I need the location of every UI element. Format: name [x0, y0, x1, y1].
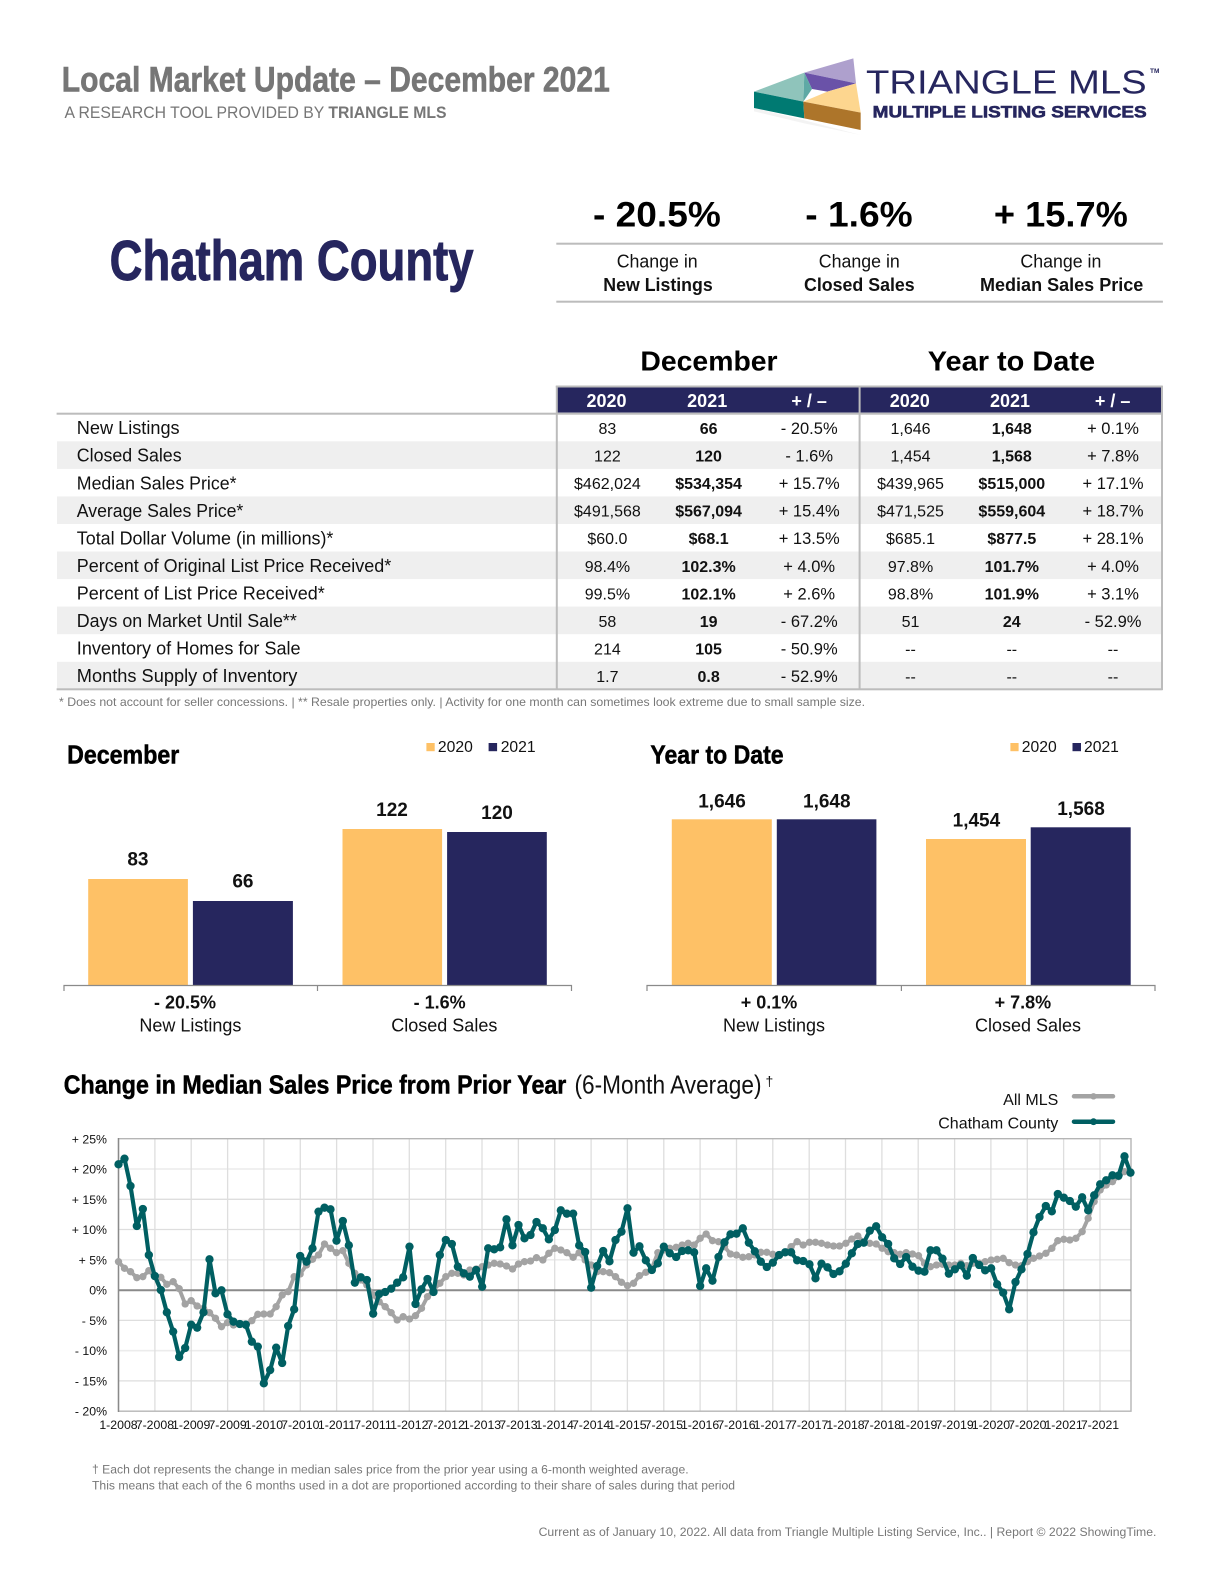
bars: Closed Sales: 1,568	[1057, 799, 1105, 820]
row: Months Supply of Inventory	[77, 666, 1118, 686]
row: Months Supply of Inventory: --	[905, 669, 916, 686]
bars: Closed Sales	[926, 799, 1131, 985]
x axis labels: 7-2021	[1081, 1418, 1119, 1432]
table footnote: * Does not account for seller concessions. | ** Resale properties only. | Activity for one month can sometimes look extreme due to small sample size.	[59, 695, 865, 709]
chart footnote: † Each dot represents the change in median sales price from the prior year using a 6-month weighted average.	[92, 1462, 689, 1476]
chart heading: December	[67, 740, 179, 770]
bars: Closed Sales: 1,454	[953, 810, 1001, 831]
x axis labels: 7-2012	[427, 1418, 465, 1432]
row: Months Supply of Inventory: 1.7	[596, 669, 619, 686]
x axis labels: 7-2009	[208, 1418, 247, 1432]
row: Median Sales Price: $439,965	[877, 476, 944, 493]
x axis labels: 7-2008	[136, 1418, 174, 1432]
bars: Closed Sales	[342, 800, 547, 985]
row: Total Dollar Volume: $68.1	[689, 531, 729, 548]
line: Chatham County	[118, 1156, 1130, 1383]
y axis labels: + 20%	[72, 1162, 107, 1176]
row: Percent of Original List Price Received: + 4.0%	[1087, 558, 1139, 576]
row: New Listings: - 20.5%	[781, 420, 838, 438]
chart footnote	[92, 1462, 735, 1493]
row: Days on Market Until Sale: Days on Market Until Sale**	[77, 611, 297, 631]
page footer credit: Current as of January 10, 2022. All data from Triangle Multiple Listing Service, Inc.. | Report © 2022 ShowingTime.	[539, 1525, 1156, 1539]
row: Percent of List Price Received: Percent of List Price Received*	[77, 584, 325, 604]
row: Closed Sales	[77, 446, 1139, 466]
chart legend	[1010, 739, 1119, 756]
bars: New Listings: 1,646	[698, 791, 746, 812]
row: Average Sales Price	[77, 501, 1144, 521]
row: Percent of Original List Price Received: 97.8%	[888, 559, 933, 576]
line chart: change in median sales price	[72, 1132, 1131, 1432]
row: Percent of Original List Price Received: + 4.0%	[783, 558, 835, 576]
table header bar	[557, 387, 1162, 413]
x axis labels: 7-2013	[499, 1418, 538, 1432]
row: Percent of List Price Received: 98.8%	[888, 586, 933, 603]
metric: closed sales	[804, 196, 915, 295]
row: Closed Sales: 120	[695, 449, 722, 466]
x axis labels: 1-2010	[245, 1418, 283, 1432]
header title: Local Market Update – December 2021	[62, 61, 610, 100]
row: Percent of List Price Received: 99.5%	[585, 586, 630, 603]
row: Average Sales Price: $567,094	[675, 504, 742, 521]
row: Inventory of Homes for Sale: --	[1108, 642, 1118, 658]
row: Closed Sales: 1,454	[890, 449, 931, 466]
table zebra rows	[57, 441, 1161, 689]
category label: Closed Sales: Closed Sales	[975, 1016, 1081, 1036]
row: Days on Market Until Sale	[77, 611, 1142, 631]
bar chart: Year to Date	[647, 739, 1155, 1036]
bars: Closed Sales: 122	[376, 800, 408, 821]
x axis labels: 1-2009	[172, 1418, 211, 1432]
x axis labels: 1-2021	[1044, 1418, 1083, 1432]
chart legend: 2021	[501, 739, 536, 756]
row: Inventory of Homes for Sale	[77, 639, 1118, 659]
metric: median sales price: + 15.7%	[994, 196, 1128, 235]
row: Total Dollar Volume: $60.0	[587, 531, 628, 548]
row: Total Dollar Volume: Total Dollar Volume (in millions)*	[77, 528, 333, 548]
metric: new listings: New Listings	[603, 275, 713, 295]
logo trademark: TM	[1150, 68, 1159, 75]
legend: Chatham County: Chatham County	[938, 1115, 1058, 1132]
row: Percent of List Price Received: 101.9%	[985, 586, 1039, 603]
bars: Closed Sales: 120	[481, 803, 513, 824]
legend: All MLS	[1003, 1092, 1113, 1109]
row: Inventory of Homes for Sale: Inventory of Homes for Sale	[77, 639, 301, 659]
row: Average Sales Price: $471,525	[877, 504, 944, 521]
row: Months Supply of Inventory: Months Supply of Inventory	[77, 666, 297, 686]
legend: All MLS: All MLS	[1003, 1092, 1058, 1109]
row: Percent of Original List Price Received: 98.4%	[585, 559, 630, 576]
category label: Closed Sales	[975, 993, 1081, 1036]
y axis labels: 0%	[89, 1284, 107, 1298]
logo tagline: MULTIPLE LISTING SERVICES	[873, 103, 1147, 121]
row: Median Sales Price: + 17.1%	[1082, 475, 1144, 493]
row: Average Sales Price: + 15.4%	[779, 503, 840, 521]
row: Inventory of Homes for Sale: --	[1006, 642, 1017, 658]
row: Days on Market Until Sale: 19	[700, 614, 718, 631]
row: New Listings: 1,648	[992, 421, 1032, 438]
row: New Listings: + 0.1%	[1087, 420, 1139, 438]
key metrics panel	[556, 196, 1163, 303]
row: Average Sales Price: $559,604	[978, 504, 1045, 521]
row: Percent of List Price Received: 102.1%	[681, 586, 736, 603]
metric: closed sales: - 1.6%	[805, 196, 913, 235]
x axis labels: 7-2014	[572, 1418, 610, 1432]
metric: closed sales: Change in	[819, 251, 900, 271]
row: Closed Sales: 122	[594, 449, 621, 466]
row: Inventory of Homes for Sale: - 50.9%	[781, 640, 838, 658]
x axis labels: 7-2010	[281, 1418, 320, 1432]
row: Average Sales Price: $491,568	[574, 504, 641, 521]
row: Percent of List Price Received	[77, 584, 1139, 604]
x axis labels: 1-2011	[318, 1418, 355, 1432]
x axis labels: 1-2013	[463, 1418, 501, 1432]
row: Percent of Original List Price Received: 101.7%	[985, 559, 1039, 576]
x axis labels: 1-2008	[99, 1418, 138, 1432]
line chart heading: †	[766, 1073, 773, 1089]
x axis labels: 1-2018	[826, 1418, 865, 1432]
table rules	[57, 386, 1163, 690]
line chart legend	[938, 1092, 1113, 1132]
bars: New Listings: 1,648	[803, 791, 851, 812]
row: Median Sales Price: $515,000	[978, 476, 1045, 493]
x axis labels: 1-2014	[536, 1418, 574, 1432]
logo icon	[754, 58, 861, 135]
table header bar: + / –	[1095, 391, 1130, 411]
x axis labels: 1-2020	[972, 1418, 1010, 1432]
x axis labels: 7-2016	[717, 1418, 756, 1432]
x axis labels: 7-2017	[790, 1418, 829, 1432]
row: Days on Market Until Sale: - 52.9%	[1085, 613, 1142, 631]
row: Percent of Original List Price Received	[77, 556, 1139, 576]
row: Percent of Original List Price Received: 102.3%	[681, 559, 736, 576]
row: Closed Sales: + 7.8%	[1087, 448, 1139, 466]
x axis labels: 1-2016	[681, 1418, 719, 1432]
metric: median sales price	[980, 196, 1143, 295]
row: Percent of Original List Price Received: Percent of Original List Price Received*	[77, 556, 391, 576]
table header bar: + / –	[791, 391, 827, 411]
category label: New Listings	[723, 993, 825, 1036]
row: Days on Market Until Sale: 58	[599, 614, 616, 631]
row: Months Supply of Inventory: 0.8	[697, 669, 720, 686]
chart heading: Year to Date	[650, 740, 784, 770]
bars: New Listings: 66	[232, 872, 253, 893]
line chart heading: Change in Median Sales Price from Prior Year	[64, 1069, 566, 1099]
category label: Closed Sales: Closed Sales	[391, 1016, 497, 1036]
logo wordmark: TRIANGLE MLS	[866, 64, 1147, 101]
row: Months Supply of Inventory: - 52.9%	[781, 668, 838, 686]
header subtitle: A RESEARCH TOOL PROVIDED BY TRIANGLE MLS	[64, 103, 446, 122]
row: Closed Sales: Closed Sales	[77, 446, 182, 466]
category label: New Listings: + 0.1%	[741, 993, 797, 1013]
row: Closed Sales: - 1.6%	[785, 448, 833, 466]
metric: closed sales: Closed Sales	[804, 275, 915, 295]
y axis labels: + 25%	[72, 1132, 107, 1146]
row: Total Dollar Volume	[77, 528, 1144, 548]
chart legend: 2020	[1022, 739, 1057, 756]
row: New Listings: New Listings	[77, 418, 180, 438]
table header bar: 2020	[586, 391, 627, 411]
line chart heading: (6-Month Average)	[574, 1069, 762, 1099]
row: Days on Market Until Sale: 24	[1003, 614, 1021, 631]
line: All MLS	[118, 1172, 1130, 1327]
y axis labels: - 10%	[75, 1344, 107, 1358]
row: Median Sales Price: $534,354	[675, 476, 742, 493]
row: New Listings: 1,646	[890, 421, 931, 438]
table header bar: 2020	[890, 391, 930, 411]
metric: median sales price: Change in	[1020, 251, 1101, 271]
y axis labels: - 15%	[75, 1374, 107, 1388]
row: Median Sales Price: Median Sales Price*	[77, 473, 236, 493]
row: Percent of List Price Received: + 3.1%	[1087, 585, 1139, 603]
chart footnote: This means that each of the 6 months used in a dot are proportioned according to their share of sales during that period	[92, 1479, 735, 1493]
x axis labels: 7-2011	[354, 1418, 392, 1432]
row: Total Dollar Volume: + 13.5%	[779, 530, 840, 548]
county name heading: Chatham County	[110, 229, 474, 293]
metric: new listings	[593, 196, 721, 295]
category label: Closed Sales: - 1.6%	[414, 993, 466, 1013]
row: Average Sales Price: Average Sales Price*	[77, 501, 243, 521]
table heading: Year to Date: Year to Date	[928, 346, 1095, 377]
row: Median Sales Price: + 15.7%	[779, 475, 840, 493]
category label: New Listings: New Listings	[723, 1016, 825, 1036]
bar chart: December	[64, 739, 572, 1036]
x axis labels: 1-2017	[754, 1418, 792, 1432]
row: Inventory of Homes for Sale: 214	[594, 642, 621, 658]
x axis labels: 7-2020	[1008, 1418, 1047, 1432]
y axis labels: - 20%	[75, 1405, 107, 1419]
row: New Listings: 66	[700, 421, 718, 438]
x axis labels	[99, 1418, 1119, 1432]
metric: new listings: Change in	[617, 251, 698, 271]
x axis labels: 7-2015	[645, 1418, 683, 1432]
chart legend: 2021	[1084, 739, 1119, 756]
chart legend: 2020	[438, 739, 473, 756]
bars: New Listings: 83	[127, 850, 148, 871]
metric: new listings: - 20.5%	[593, 196, 721, 235]
category label: New Listings	[139, 993, 241, 1036]
chart legend	[426, 739, 536, 756]
bars: New Listings	[672, 791, 876, 985]
category label: Closed Sales	[391, 993, 497, 1036]
y axis labels	[72, 1132, 107, 1419]
y axis labels: + 15%	[72, 1193, 107, 1207]
logo: Triangle MLS	[754, 58, 1159, 135]
row: Inventory of Homes for Sale: 105	[695, 642, 722, 658]
table heading: December: December	[640, 346, 778, 377]
row: Total Dollar Volume: $685.1	[886, 531, 935, 548]
row: Percent of List Price Received: + 2.6%	[783, 585, 835, 603]
row: Days on Market Until Sale: 51	[902, 614, 920, 631]
x axis labels: 1-2012	[390, 1418, 429, 1432]
row: New Listings	[77, 418, 1139, 438]
row: Total Dollar Volume: $877.5	[987, 531, 1036, 548]
category label: Closed Sales: + 7.8%	[995, 993, 1051, 1013]
data table	[57, 386, 1163, 690]
table header bar: 2021	[990, 391, 1030, 411]
category label: New Listings: - 20.5%	[154, 993, 216, 1013]
x axis labels: 1-2015	[608, 1418, 647, 1432]
row: Total Dollar Volume: + 28.1%	[1082, 530, 1144, 548]
y axis labels: - 5%	[82, 1314, 107, 1328]
row: Closed Sales: 1,568	[992, 449, 1032, 466]
table header bar: 2021	[687, 391, 727, 411]
x axis labels: 7-2018	[863, 1418, 901, 1432]
y axis labels: + 10%	[72, 1223, 107, 1237]
row: New Listings: 83	[599, 421, 616, 438]
row: Inventory of Homes for Sale: --	[905, 642, 916, 658]
row: Months Supply of Inventory: --	[1006, 669, 1017, 686]
x axis labels: 7-2019	[935, 1418, 974, 1432]
row: Median Sales Price	[77, 473, 1144, 493]
y axis labels: + 5%	[79, 1253, 107, 1267]
metric: median sales price: Median Sales Price	[980, 275, 1143, 295]
bars: New Listings	[88, 850, 293, 985]
x axis labels: 1-2019	[899, 1418, 938, 1432]
legend: Chatham County	[938, 1115, 1113, 1132]
category label: New Listings: New Listings	[139, 1016, 241, 1036]
row: Months Supply of Inventory: --	[1108, 669, 1118, 686]
row: Days on Market Until Sale: - 67.2%	[781, 613, 838, 631]
row: Median Sales Price: $462,024	[574, 476, 641, 493]
row: Average Sales Price: + 18.7%	[1082, 503, 1144, 521]
